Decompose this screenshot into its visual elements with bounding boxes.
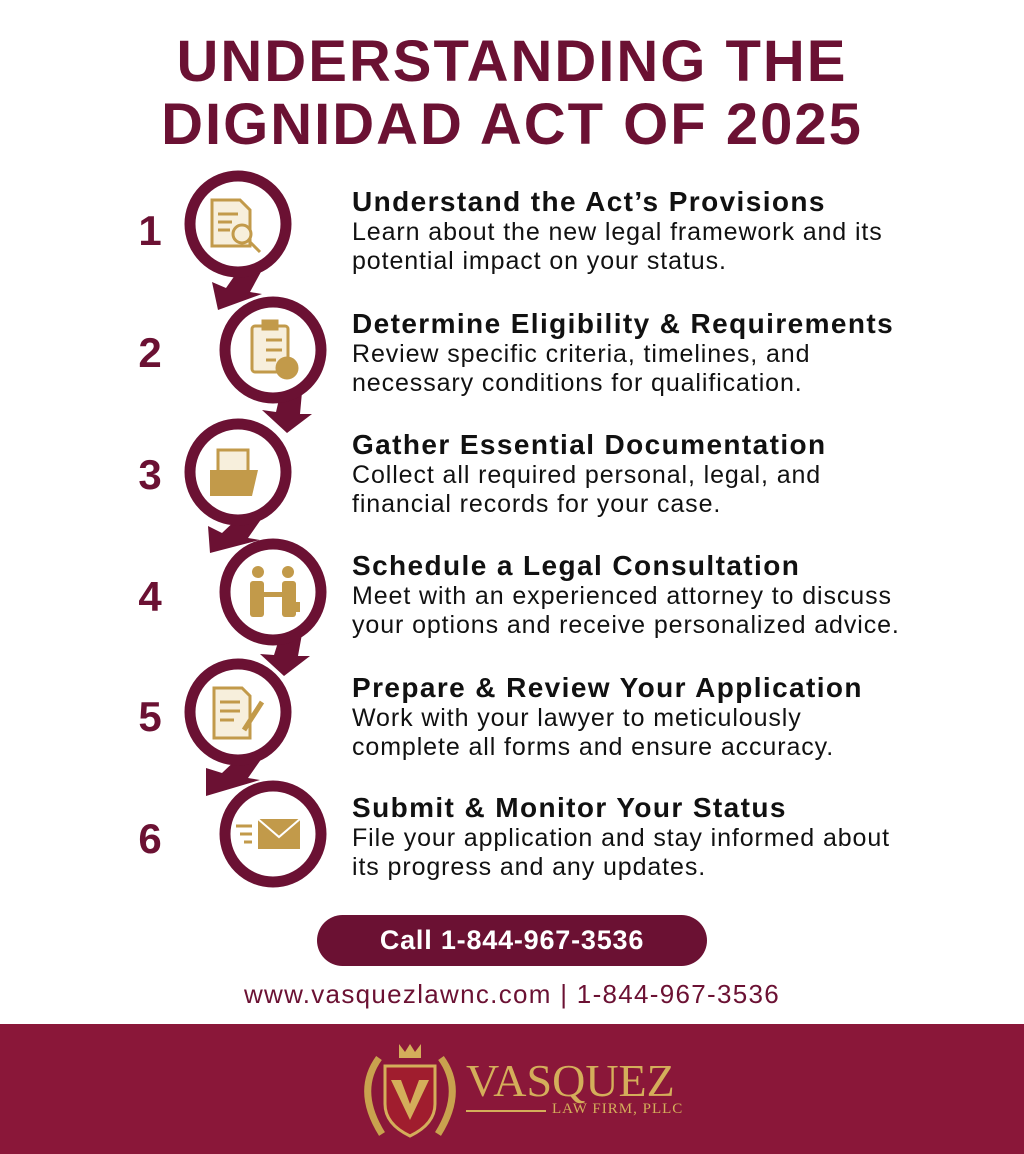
step 5 text: Prepare & Review Your Application (352, 672, 863, 703)
step 5 text (352, 672, 863, 761)
call button: Call 1-844-967-3536 (380, 925, 644, 955)
step 5 text: Work with your lawyer to meticulously (352, 704, 802, 732)
text: 5 (138, 693, 162, 740)
text: 6 (138, 815, 162, 862)
footer band: LAW FIRM, PLLC (552, 1101, 683, 1117)
title: UNDERSTANDING THE (177, 29, 847, 94)
text: 2 (138, 329, 162, 376)
logo text: VASQUEZ (466, 1055, 675, 1106)
icon: form with pen (214, 688, 262, 738)
step 6 text: its progress and any updates. (352, 853, 706, 881)
step 6 text: File your application and stay informed about (352, 824, 890, 852)
step 2 text (352, 308, 894, 397)
step 4 text: Meet with an experienced attorney to discuss (352, 582, 892, 610)
icon: clipboard (252, 321, 297, 378)
step 1 text (352, 186, 883, 275)
step numbers (138, 207, 162, 862)
footer band (0, 1024, 1024, 1154)
step 4 text: Schedule a Legal Consultation (352, 550, 800, 581)
step 2 text: necessary conditions for qualification. (352, 369, 803, 397)
step 2 text: Review specific criteria, timelines, and (352, 340, 810, 368)
arrows (206, 268, 312, 796)
icon: envelope (236, 819, 300, 849)
website and phone: www.vasquezlawnc.com | 1-844-967-3536 (244, 979, 780, 1009)
text: 3 (138, 451, 162, 498)
step circles and arrows (184, 170, 326, 888)
step 4 text: your options and receive personalized advice. (352, 611, 900, 639)
circles (190, 176, 321, 882)
step 1 text: potential impact on your status. (352, 247, 727, 275)
call button (317, 915, 707, 966)
step 3 text (352, 429, 827, 518)
step 3 text: financial records for your case. (352, 490, 721, 518)
text: 1 (138, 207, 162, 254)
title: DIGNIDAD ACT OF 2025 (161, 92, 863, 157)
step 6 text: Submit & Monitor Your Status (352, 792, 787, 823)
icon: folder (210, 450, 258, 496)
title (161, 29, 863, 157)
step 5 text: complete all forms and ensure accuracy. (352, 733, 834, 761)
step 6 text (352, 792, 890, 881)
icon: handshake (250, 566, 300, 617)
step 2 text: Determine Eligibility & Requirements (352, 308, 894, 339)
logo crest (364, 1044, 456, 1138)
step 3 text: Gather Essential Documentation (352, 429, 827, 460)
step 1 text: Understand the Act’s Provisions (352, 186, 826, 217)
icon: document search (212, 200, 260, 252)
text: 4 (138, 573, 162, 620)
step 4 text (352, 550, 900, 639)
step 1 text: Learn about the new legal framework and its (352, 218, 883, 246)
step 3 text: Collect all required personal, legal, and (352, 461, 821, 489)
